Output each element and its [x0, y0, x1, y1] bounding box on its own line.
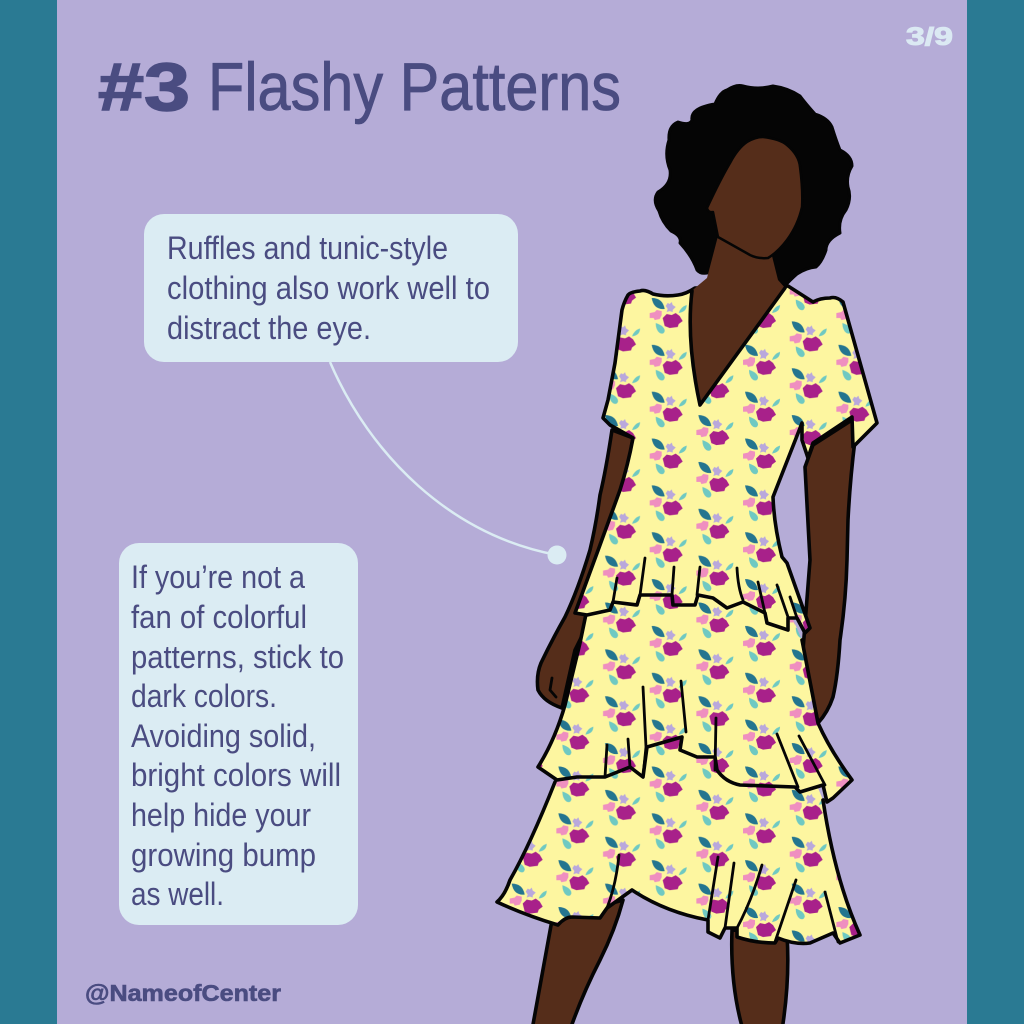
neck and chest	[690, 236, 786, 405]
handle: @NameofCenter	[85, 980, 281, 1006]
right leg	[732, 930, 788, 1024]
page number: 3/9	[906, 23, 953, 51]
callout: dark colors: dark colors.	[131, 678, 277, 714]
right arm	[803, 420, 855, 723]
leader line	[330, 362, 566, 564]
title: Flashy Patterns	[208, 49, 621, 125]
skirt bottom tier fill	[497, 720, 860, 943]
callout: ruffles: distract the eye.	[167, 310, 371, 346]
left arm	[537, 430, 633, 708]
callout: dark colors: help hide your	[131, 797, 311, 833]
callout: dark colors: bright colors will	[131, 757, 341, 793]
neckline edge	[690, 288, 785, 405]
callout: dark colors: fan of colorful	[131, 599, 307, 635]
hair	[655, 86, 852, 288]
bodice and top ruffle	[575, 286, 877, 633]
skirt middle tier outline	[538, 614, 852, 802]
callout: dark colors: Avoiding solid,	[131, 718, 316, 754]
figure	[497, 86, 877, 1024]
callout: ruffles	[144, 214, 518, 362]
callout: ruffles: Ruffles and tunic-style	[167, 230, 448, 266]
callout: dark colors: patterns, stick to	[131, 639, 344, 675]
callout: dark colors: as well.	[131, 876, 224, 912]
title: #3	[98, 49, 190, 125]
face	[707, 137, 802, 258]
callout: ruffles: clothing also work well to	[167, 270, 490, 306]
left leg	[532, 900, 623, 1024]
callout: dark colors	[119, 543, 358, 925]
callout: dark colors: growing bump	[131, 837, 316, 873]
skirt bottom tier outline	[497, 782, 860, 943]
ruffle lines	[550, 558, 838, 942]
callout: dark colors: If you’re not a	[131, 559, 305, 595]
skirt middle tier fill	[538, 590, 852, 802]
